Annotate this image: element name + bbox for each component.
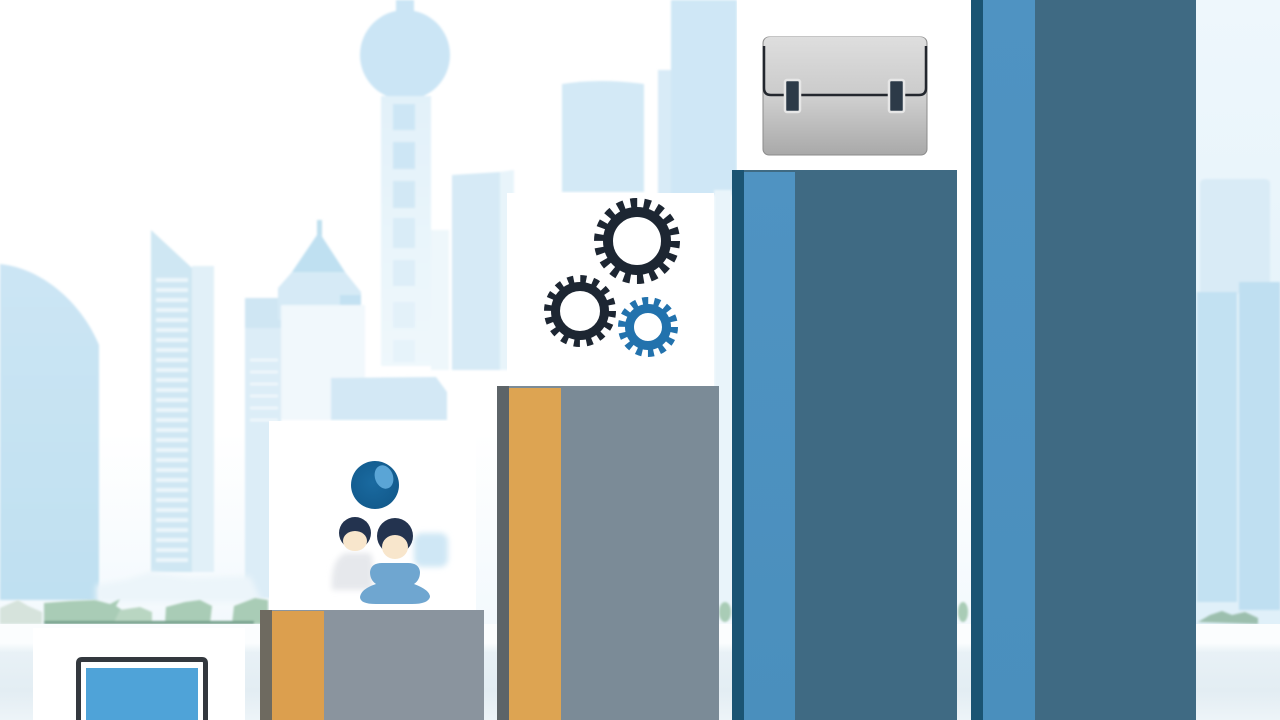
gear: large dark (599, 203, 675, 279)
panel: people backdrop (269, 421, 476, 611)
person: back (332, 517, 373, 590)
haze at skyline base (96, 572, 262, 602)
building: mid tower (452, 170, 514, 370)
speech cloud (414, 533, 448, 567)
icon: laptop (78, 660, 206, 720)
building: right pale tower (1200, 179, 1270, 295)
panel: briefcase backdrop (737, 0, 951, 171)
building: striped tower (151, 230, 214, 572)
building: rounded block (562, 81, 644, 192)
bar 1 (260, 610, 484, 720)
building: low roof (331, 377, 447, 420)
bar 3 (732, 170, 957, 720)
icon: gears (548, 203, 675, 352)
right background wash (1196, 0, 1280, 625)
bar 2 (497, 386, 719, 720)
tree line (0, 598, 1258, 624)
building: tall tower (658, 0, 737, 620)
globe (351, 461, 399, 509)
building: right tower front right (1239, 282, 1280, 610)
building: oriental pearl tower (360, 0, 450, 370)
panel: gears backdrop (507, 193, 714, 387)
building: right tower front left (1197, 292, 1237, 602)
clasp: left (785, 80, 800, 112)
bar 4 (971, 0, 1196, 720)
gear: medium dark (548, 279, 612, 343)
gear: small blue (622, 302, 674, 352)
icon: briefcase (763, 37, 927, 155)
building: curved left tower (0, 264, 99, 600)
person: front (360, 518, 430, 604)
waterfront (0, 624, 1280, 720)
building: pointed dome tower (245, 220, 365, 598)
clasp: right (889, 80, 904, 112)
icon: people with globe (332, 461, 448, 604)
panel: laptop backdrop (33, 628, 245, 720)
